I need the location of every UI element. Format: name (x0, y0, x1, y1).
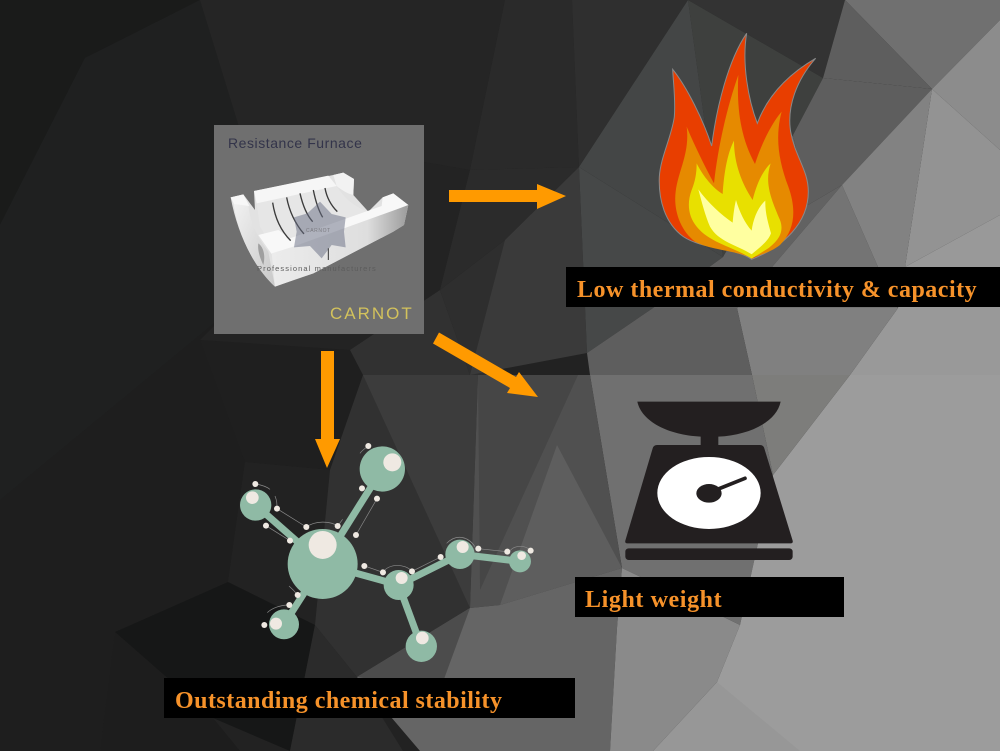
brand name: CARNOT (330, 304, 414, 323)
icon: flame (659, 33, 816, 259)
product image: resistance furnace card (214, 125, 424, 334)
icon: molecule (240, 443, 534, 662)
label: light weight: Light weight (585, 587, 722, 613)
arrow: to light weight (433, 332, 538, 397)
label: chemical stability (164, 678, 575, 718)
watermark brand text: CARNOT (306, 228, 331, 234)
watermark star (294, 202, 346, 258)
watermark tagline: Professional manufacturers (257, 264, 377, 273)
arrow: to thermal property (449, 184, 566, 209)
label: thermal property: Low thermal conductivity & capacity (577, 277, 977, 303)
icon: kitchen scale (625, 402, 793, 560)
furnace part illustration (231, 173, 408, 287)
label: light weight (575, 577, 844, 617)
card title: Resistance Furnace (228, 135, 362, 151)
label: thermal property (566, 267, 1000, 307)
arrow: to chemical stability (315, 351, 340, 468)
label: chemical stability: Outstanding chemical stability (175, 688, 502, 714)
